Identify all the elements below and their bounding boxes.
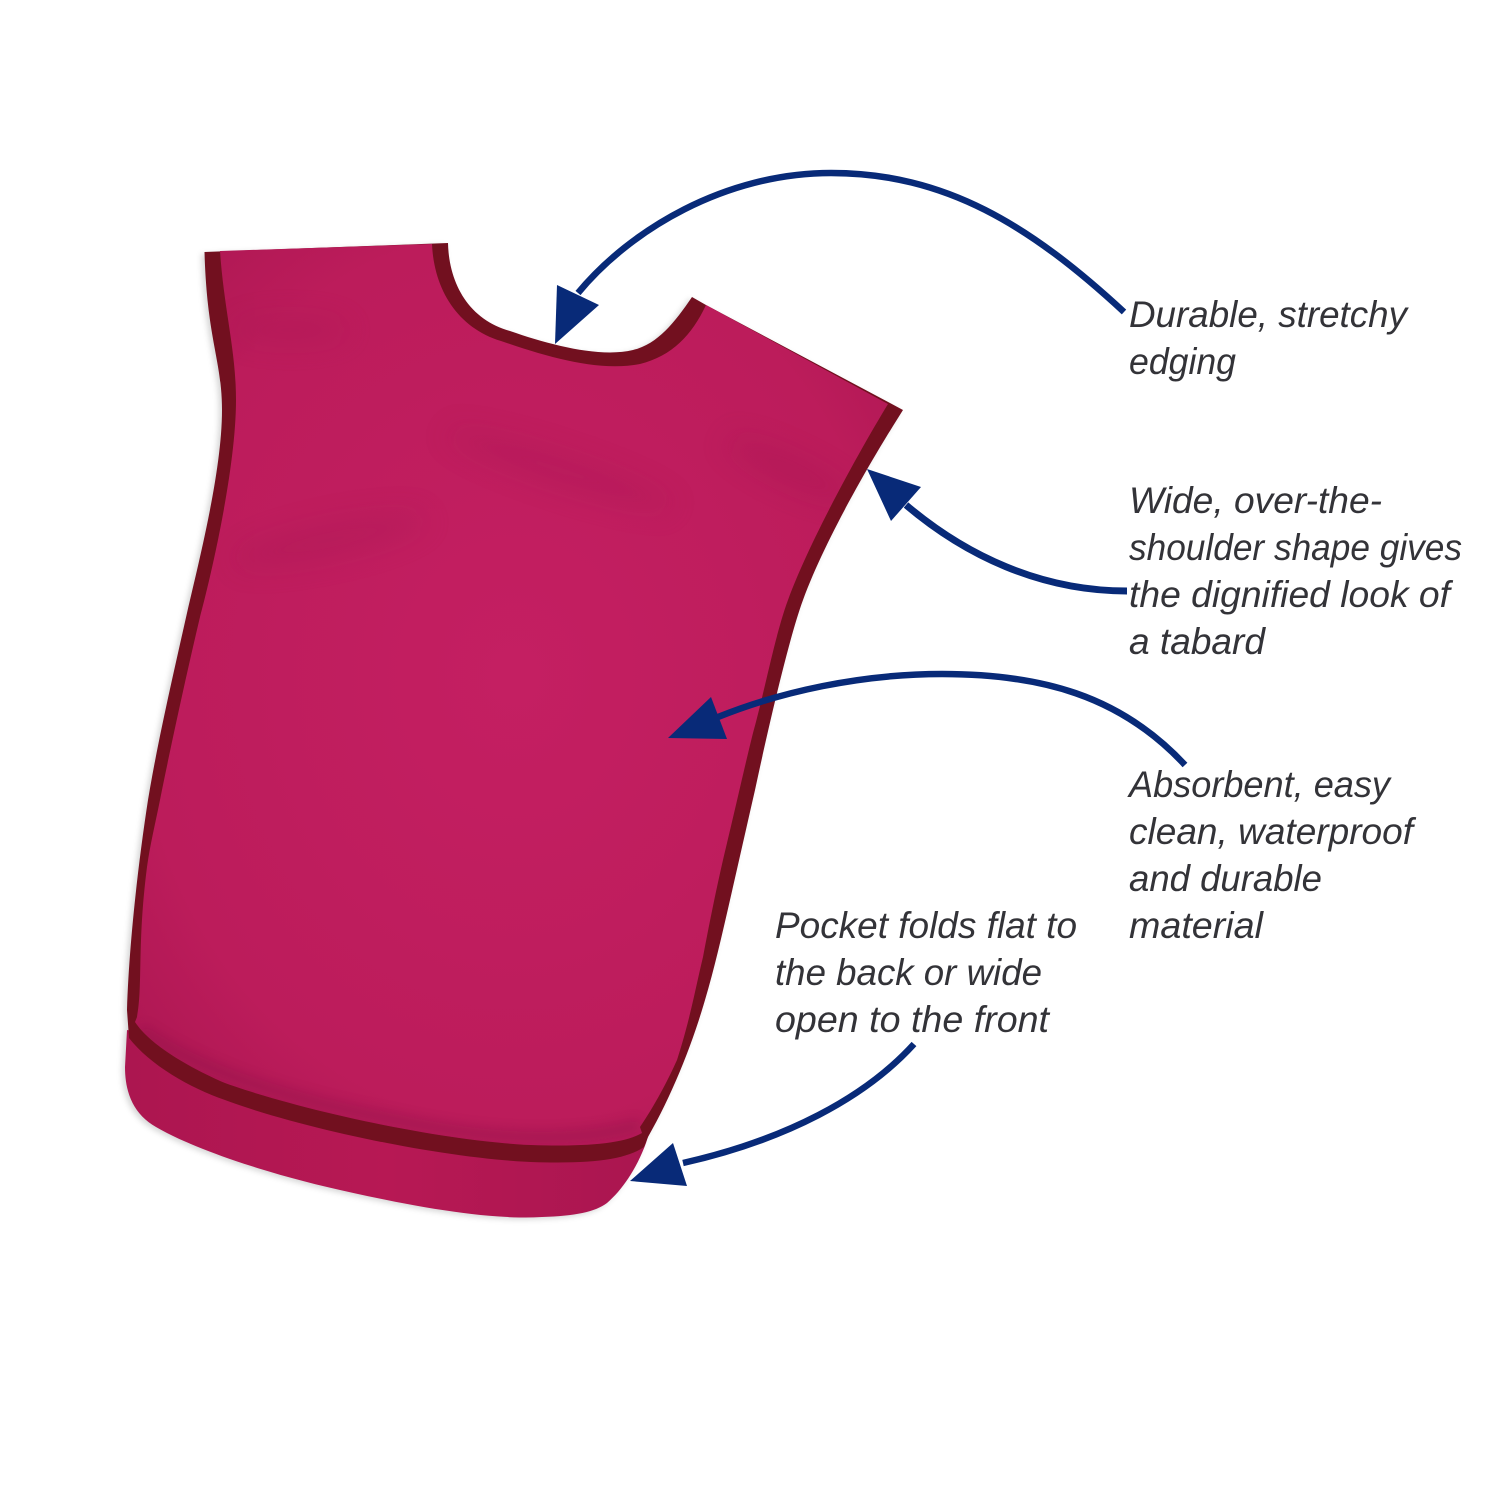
- callout: shape: Wide, over-the-: [1129, 480, 1382, 521]
- callout: edging: edging: [1129, 341, 1236, 382]
- arrow: material: [668, 674, 1185, 765]
- callout: pocket: the back or wide: [775, 952, 1042, 993]
- callout: material: Absorbent, easy: [1127, 764, 1392, 805]
- infographic: [120, 170, 1462, 1222]
- arrow: pocket: [630, 1044, 914, 1186]
- callout: pocket: Pocket folds flat to: [775, 905, 1077, 946]
- fabric body: [120, 230, 910, 1160]
- arrow: edging: [555, 173, 1124, 344]
- pocket flap: [125, 1030, 650, 1217]
- callout: shape: [1129, 480, 1462, 662]
- callout: material: and durable: [1129, 858, 1322, 899]
- callout: material: [1127, 764, 1417, 946]
- callout: shape: shoulder shape gives: [1129, 527, 1462, 568]
- bib garment: [120, 230, 910, 1217]
- callout: edging: [1129, 294, 1409, 382]
- dark edging: [127, 243, 903, 1162]
- callout: shape: a tabard: [1129, 621, 1266, 662]
- callout: pocket: [775, 905, 1077, 1040]
- callout: edging: Durable, stretchy: [1129, 294, 1409, 335]
- callout: material: material: [1129, 905, 1265, 946]
- callout: shape: the dignified look of: [1129, 574, 1454, 615]
- callout: pocket: open to the front: [775, 999, 1051, 1040]
- arrow: shoulder shape: [867, 469, 1127, 591]
- callout: material: clean, waterproof: [1129, 811, 1417, 852]
